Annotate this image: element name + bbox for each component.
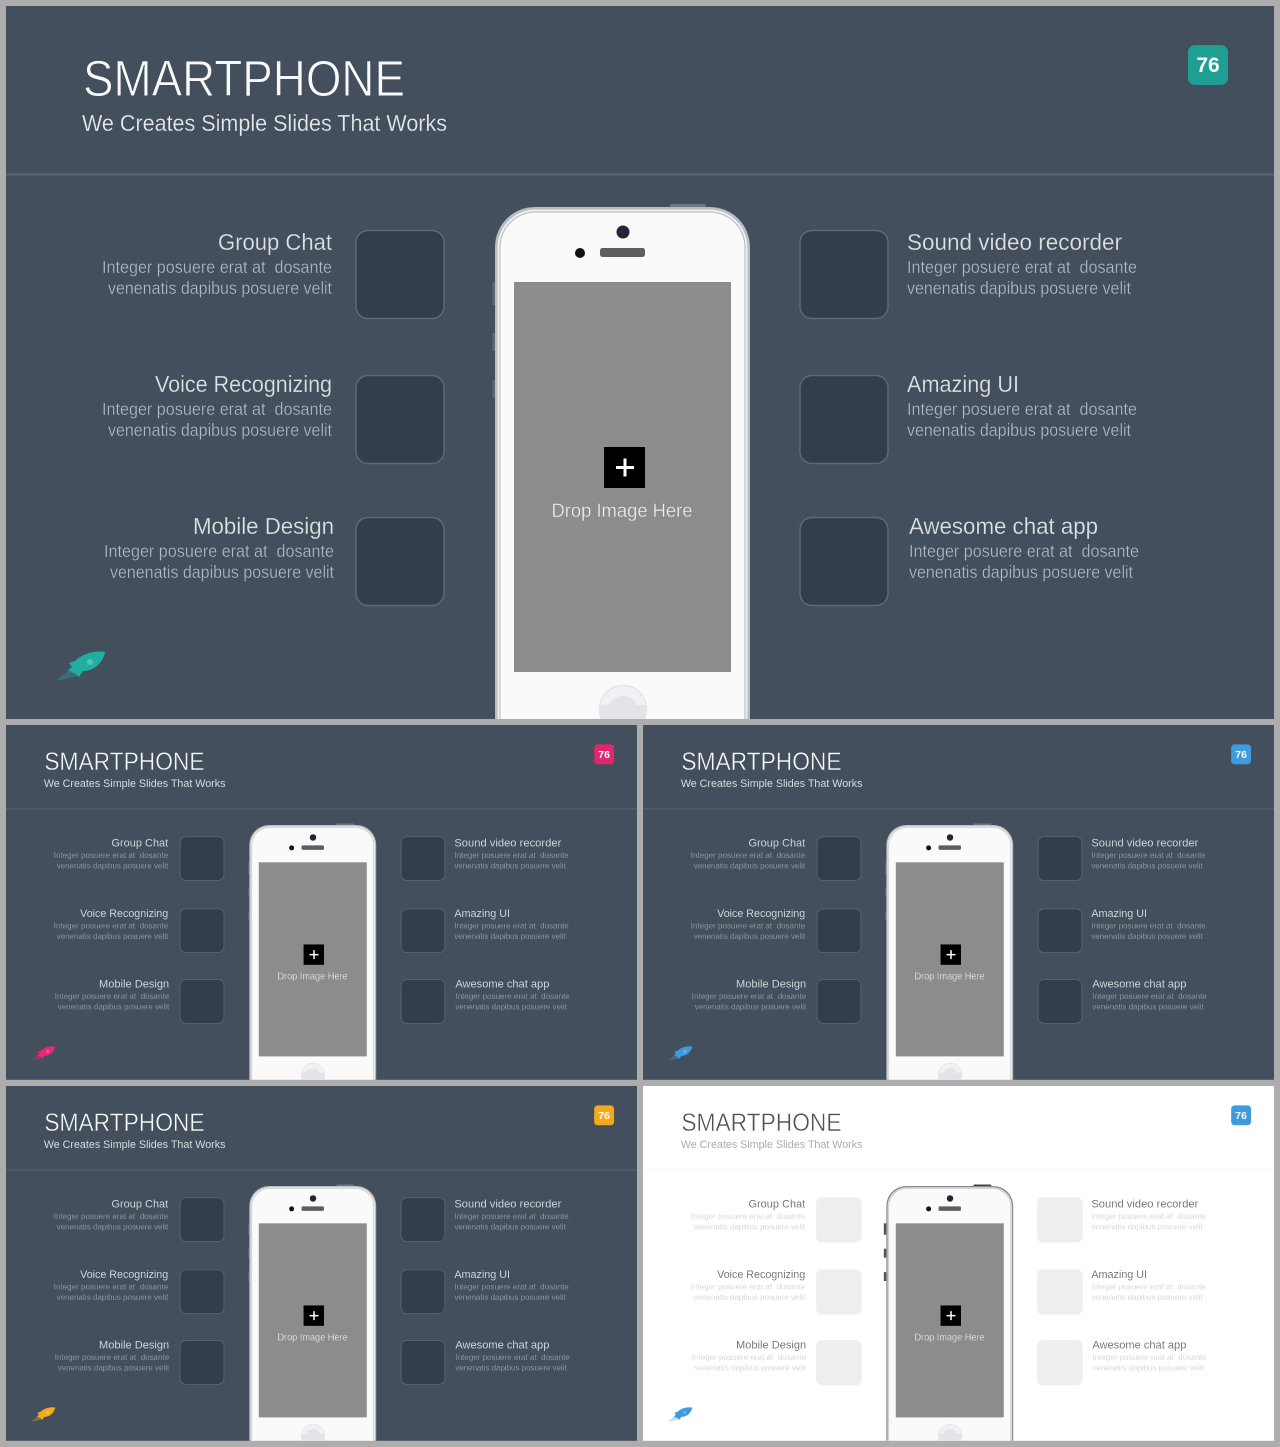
feature: Voice Recognizing (102, 371, 444, 464)
feature: Voice Recognizing (691, 1269, 861, 1314)
feature: Group Chat: Group Chat (748, 837, 806, 849)
feature: Mobile Design: Mobile Design (736, 979, 806, 991)
feature: Group Chat: Integer posuere erat at dosante (691, 1211, 805, 1221)
feature: Voice Recognizing: venenatis dapibus posuere velit (57, 1292, 169, 1302)
feature: Sound video recorder: venenatis dapibus posuere velit (454, 1221, 566, 1231)
panel: blue slide (643, 725, 1274, 1104)
feature: Group Chat: Group Chat (111, 837, 169, 849)
feature: Amazing UI (401, 908, 569, 953)
feature: Group Chat (54, 1198, 224, 1242)
feature: Mobile Design: Mobile Design (736, 1340, 806, 1352)
feature: Sound video recorder: venenatis dapibus posuere velit (454, 860, 566, 870)
feature: Sound video recorder (1038, 837, 1206, 880)
icon: rocket (31, 1046, 55, 1061)
smartphone mockup: Drop Image Here (277, 971, 348, 982)
feature: Mobile Design (104, 513, 444, 606)
feature: Awesome chat app: venenatis dapibus posuere velit (1092, 1363, 1204, 1373)
feature: Awesome chat app (401, 1340, 570, 1384)
panel: white slide (643, 1086, 1274, 1447)
page number badge (1231, 1105, 1251, 1125)
feature: Group Chat: Integer posuere erat at dosante (102, 257, 332, 277)
page number badge (1231, 744, 1251, 764)
feature: Awesome chat app: venenatis dapibus posuere velit (455, 1002, 567, 1012)
feature: Amazing UI: Integer posuere erat at dosante (454, 921, 569, 931)
feature: Voice Recognizing: venenatis dapibus posuere velit (694, 1292, 806, 1302)
feature: Mobile Design (692, 1340, 861, 1385)
feature: Sound video recorder: Sound video recorder (1091, 837, 1198, 849)
feature: Amazing UI (1038, 908, 1206, 953)
feature: Sound video recorder: Integer posuere erat at dosante (907, 257, 1137, 277)
smartphone mockup (248, 1185, 376, 1447)
feature: Sound video recorder (800, 229, 1137, 318)
feature: Awesome chat app: Awesome chat app (1092, 1340, 1186, 1352)
feature: Group Chat (54, 837, 224, 880)
feature: Voice Recognizing (691, 908, 861, 953)
feature: Amazing UI (800, 371, 1137, 464)
feature: Amazing UI: Integer posuere erat at dosante (907, 399, 1137, 419)
icon: rocket (31, 1407, 55, 1422)
feature: Voice Recognizing: Voice Recognizing (80, 1269, 168, 1281)
feature: Awesome chat app: Awesome chat app (455, 979, 549, 991)
feature: Amazing UI: Amazing UI (907, 371, 1019, 397)
feature: Awesome chat app (401, 979, 570, 1023)
subtitle: We Creates Simple Slides That Works (681, 1139, 863, 1151)
title: SMARTPHONE (681, 748, 842, 776)
feature: Awesome chat app: Integer posuere erat at dosante (1092, 991, 1207, 1001)
feature: Awesome chat app (1037, 1340, 1207, 1385)
feature: Sound video recorder: Sound video recorder (1091, 1198, 1198, 1210)
feature: Sound video recorder: Integer posuere erat at dosante (454, 1211, 569, 1221)
page number badge: 76 (1196, 54, 1220, 77)
smartphone mockup (885, 824, 1013, 1104)
feature: Voice Recognizing: venenatis dapibus posuere velit (108, 420, 332, 440)
feature: Group Chat: venenatis dapibus posuere velit (57, 860, 169, 870)
panel: main teal slide (6, 6, 1274, 767)
feature: Mobile Design: venenatis dapibus posuere velit (110, 562, 334, 582)
feature: Awesome chat app: Awesome chat app (455, 1340, 549, 1352)
feature: Voice Recognizing (54, 908, 224, 953)
feature: Amazing UI: venenatis dapibus posuere velit (454, 931, 566, 941)
feature: Amazing UI: Integer posuere erat at dosante (1091, 921, 1206, 931)
feature: Voice Recognizing: Integer posuere erat at dosante (691, 921, 805, 931)
smartphone mockup: Drop Image Here (914, 971, 985, 982)
feature: Sound video recorder (401, 1198, 569, 1242)
feature: Voice Recognizing: Integer posuere erat at dosante (102, 399, 332, 419)
feature: Amazing UI: Amazing UI (1091, 1269, 1147, 1281)
feature: Voice Recognizing: venenatis dapibus posuere velit (57, 931, 169, 941)
feature: Awesome chat app: Integer posuere erat at dosante (455, 991, 570, 1001)
feature: Sound video recorder: venenatis dapibus posuere velit (1091, 860, 1203, 870)
feature: Voice Recognizing: Voice Recognizing (155, 371, 332, 397)
feature: Mobile Design: venenatis dapibus posuere velit (58, 1363, 170, 1373)
feature: Amazing UI (401, 1269, 569, 1314)
feature: Awesome chat app (1038, 979, 1207, 1023)
feature: Voice Recognizing: Voice Recognizing (717, 908, 805, 920)
feature: Mobile Design: Mobile Design (193, 513, 334, 539)
feature: Mobile Design (55, 979, 224, 1023)
feature: Sound video recorder: venenatis dapibus posuere velit (1091, 1221, 1203, 1231)
panel: pink slide (6, 725, 637, 1104)
feature: Mobile Design: venenatis dapibus posuere velit (58, 1002, 170, 1012)
subtitle: We Creates Simple Slides That Works (681, 778, 863, 790)
feature: Awesome chat app: Integer posuere erat at dosante (455, 1352, 570, 1362)
feature: Mobile Design: venenatis dapibus posuere velit (695, 1002, 807, 1012)
icon: rocket (56, 651, 105, 681)
feature: Voice Recognizing: venenatis dapibus posuere velit (694, 931, 806, 941)
page number badge: 76 (598, 1111, 610, 1122)
subtitle: We Creates Simple Slides That Works (82, 110, 447, 136)
feature: Amazing UI: venenatis dapibus posuere velit (1091, 1292, 1203, 1302)
feature: Awesome chat app (800, 513, 1139, 606)
feature: Mobile Design (692, 979, 861, 1023)
feature: Amazing UI: Integer posuere erat at dosante (454, 1282, 569, 1292)
page number badge: 76 (1235, 750, 1247, 761)
feature: Mobile Design: Mobile Design (99, 1340, 169, 1352)
feature: Amazing UI: Amazing UI (454, 908, 510, 920)
smartphone mockup: Drop Image Here (277, 1332, 348, 1343)
feature: Awesome chat app: Awesome chat app (909, 513, 1098, 539)
feature: Mobile Design: Integer posuere erat at dosante (104, 541, 334, 561)
feature: Sound video recorder: Sound video recorder (907, 229, 1122, 255)
feature: Amazing UI: venenatis dapibus posuere velit (454, 1292, 566, 1302)
feature: Awesome chat app: venenatis dapibus posuere velit (1092, 1002, 1204, 1012)
feature: Amazing UI (1037, 1269, 1206, 1314)
feature: Group Chat: Integer posuere erat at dosante (54, 1211, 168, 1221)
feature: Awesome chat app: Integer posuere erat at dosante (909, 541, 1139, 561)
page number badge (594, 744, 614, 764)
feature: Voice Recognizing: Voice Recognizing (80, 908, 168, 920)
feature: Amazing UI: Amazing UI (454, 1269, 510, 1281)
feature: Group Chat: venenatis dapibus posuere velit (694, 1221, 806, 1231)
feature: Group Chat (691, 837, 861, 880)
feature: Group Chat: Integer posuere erat at dosante (54, 850, 168, 860)
smartphone mockup: Drop Image Here (914, 1332, 985, 1343)
feature: Mobile Design: Integer posuere erat at dosante (55, 1352, 169, 1362)
feature: Amazing UI: venenatis dapibus posuere velit (1091, 931, 1203, 941)
feature: Awesome chat app: venenatis dapibus posuere velit (455, 1363, 567, 1373)
feature: Group Chat: venenatis dapibus posuere velit (108, 278, 332, 298)
feature: Mobile Design (55, 1340, 224, 1384)
page number badge (1188, 45, 1228, 85)
feature: Awesome chat app: Integer posuere erat at dosante (1092, 1352, 1207, 1362)
feature: Mobile Design: Integer posuere erat at dosante (692, 991, 806, 1001)
panel: orange slide (6, 1086, 637, 1447)
feature: Sound video recorder: Sound video recorder (454, 1198, 561, 1210)
feature: Group Chat: Group Chat (218, 229, 333, 255)
feature: Voice Recognizing: Integer posuere erat at dosante (54, 1282, 168, 1292)
page number badge: 76 (598, 750, 610, 761)
feature: Sound video recorder: Integer posuere erat at dosante (1091, 1211, 1206, 1221)
feature: Voice Recognizing (54, 1269, 224, 1314)
feature: Mobile Design: Integer posuere erat at dosante (692, 1352, 806, 1362)
feature: Mobile Design: Mobile Design (99, 979, 169, 991)
title: SMARTPHONE (44, 748, 205, 776)
feature: Awesome chat app: Awesome chat app (1092, 979, 1186, 991)
smartphone mockup (884, 1185, 1013, 1447)
smartphone mockup: Drop Image Here (552, 500, 692, 522)
title: SMARTPHONE (44, 1109, 205, 1137)
feature: Sound video recorder: Integer posuere erat at dosante (1091, 850, 1206, 860)
page number badge (594, 1105, 614, 1125)
smartphone mockup (248, 824, 376, 1104)
feature: Mobile Design: venenatis dapibus posuere velit (695, 1363, 807, 1373)
subtitle: We Creates Simple Slides That Works (44, 1139, 226, 1151)
feature: Sound video recorder: venenatis dapibus posuere velit (907, 278, 1131, 298)
feature: Sound video recorder: Sound video recorder (454, 837, 561, 849)
feature: Sound video recorder (401, 837, 569, 880)
feature: Amazing UI: Amazing UI (1091, 908, 1147, 920)
title: SMARTPHONE (681, 1109, 842, 1137)
feature: Group Chat (102, 229, 444, 318)
feature: Group Chat: venenatis dapibus posuere velit (57, 1221, 169, 1231)
feature: Voice Recognizing: Integer posuere erat at dosante (54, 921, 168, 931)
feature: Mobile Design: Integer posuere erat at dosante (55, 991, 169, 1001)
feature: Group Chat: Group Chat (748, 1198, 806, 1210)
icon: rocket (668, 1407, 692, 1422)
smartphone mockup (492, 204, 750, 767)
subtitle: We Creates Simple Slides That Works (44, 778, 226, 790)
feature: Amazing UI: Integer posuere erat at dosante (1091, 1282, 1206, 1292)
feature: Group Chat: venenatis dapibus posuere velit (694, 860, 806, 870)
feature: Group Chat: Integer posuere erat at dosante (691, 850, 805, 860)
feature: Group Chat: Group Chat (111, 1198, 169, 1210)
title: SMARTPHONE (83, 50, 405, 107)
feature: Sound video recorder (1037, 1197, 1206, 1242)
feature: Voice Recognizing: Integer posuere erat at dosante (691, 1282, 805, 1292)
feature: Voice Recognizing: Voice Recognizing (717, 1269, 805, 1281)
feature: Group Chat (691, 1197, 861, 1242)
page number badge: 76 (1235, 1111, 1247, 1122)
feature: Amazing UI: venenatis dapibus posuere velit (907, 420, 1131, 440)
icon: rocket (668, 1046, 692, 1061)
feature: Sound video recorder: Integer posuere erat at dosante (454, 850, 569, 860)
feature: Awesome chat app: venenatis dapibus posuere velit (909, 562, 1133, 582)
